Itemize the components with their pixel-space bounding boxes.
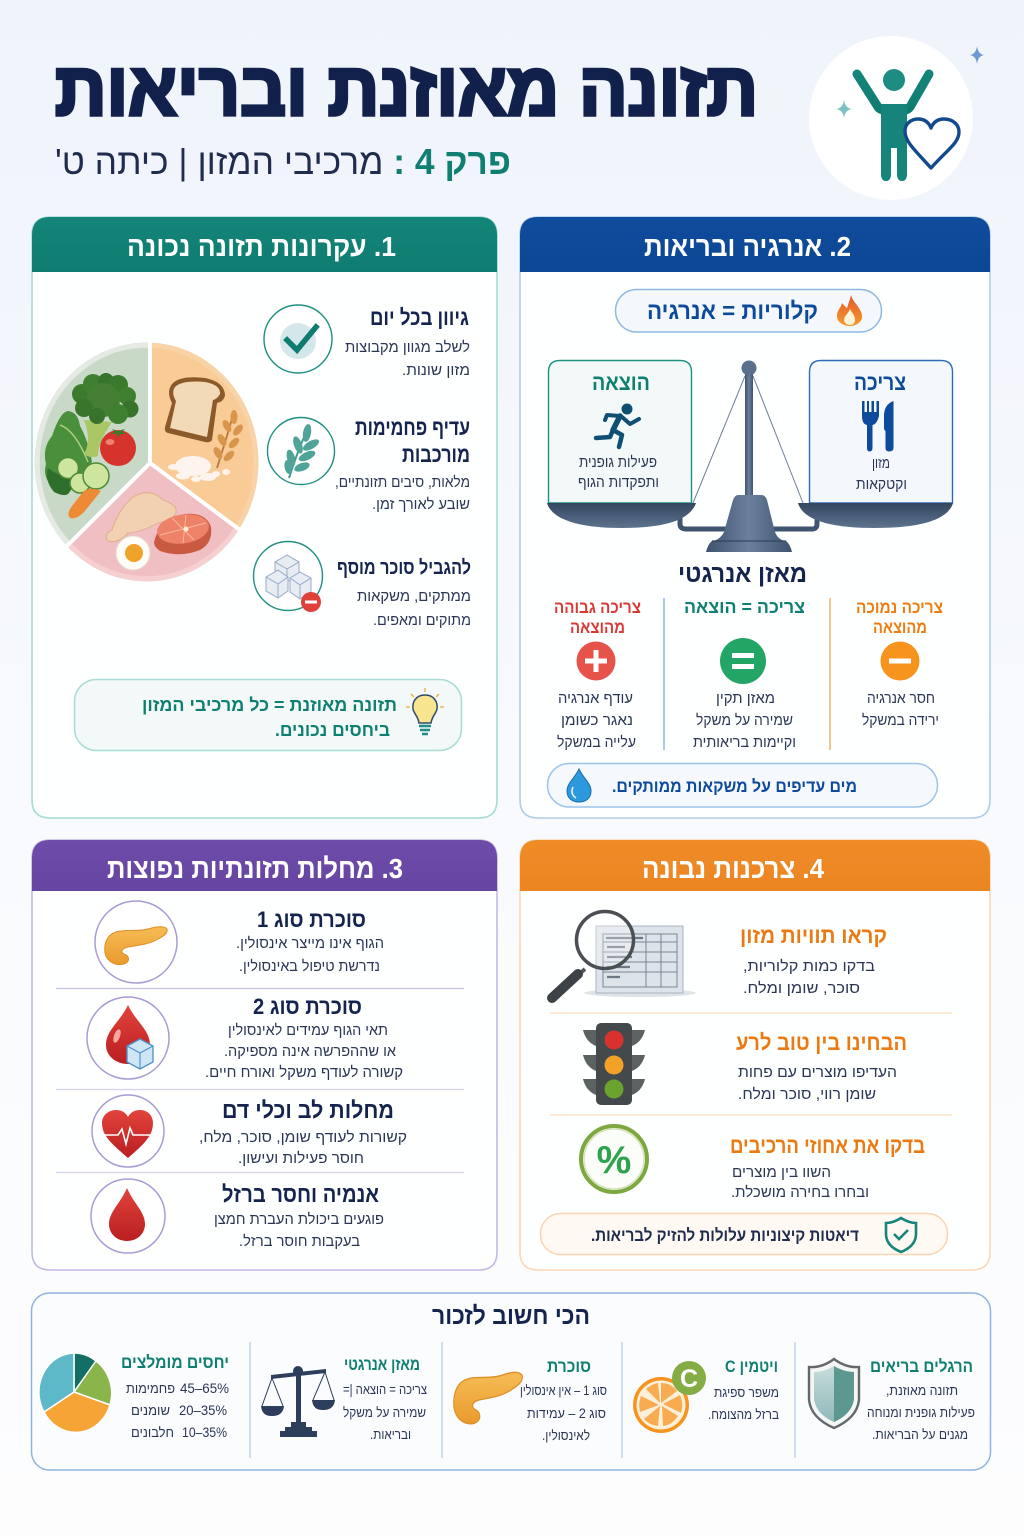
summary: healthy habits: הרגלים בריאים — [870, 1357, 973, 1376]
summary: recommended ratios: פחמימות — [126, 1381, 175, 1396]
summary: recommended ratios — [121, 1353, 229, 1440]
panel header: principles: 1. עקרונות תזונה נכונה — [127, 231, 396, 262]
item: prefer complex carbs — [335, 415, 470, 513]
icon: orange with vitamin C — [633, 1361, 706, 1433]
column: intake below output: מהוצאה — [873, 618, 927, 637]
box: energy out: פעילות גופנית — [579, 454, 657, 471]
icon: water drop — [567, 769, 591, 802]
box: energy in: וקטקאות — [856, 476, 907, 493]
row: heart disease: חוסר פעילות ועישון. — [238, 1150, 364, 1167]
panel header: consumption — [520, 840, 990, 891]
summary: vitamin C: ויטמין C — [725, 1357, 778, 1376]
bread — [165, 377, 225, 442]
summary: energy balance: ובריאות. — [370, 1427, 411, 1442]
row: heart disease — [199, 1097, 407, 1167]
summary: energy balance: צריכה = הוצאה |= — [343, 1382, 427, 1397]
item: limit added sugar — [337, 557, 471, 629]
row: tell good from bad: הבחינו בין טוב לרע — [736, 1030, 907, 1055]
column: intake equals output: וקיימות בריאותית — [693, 734, 796, 751]
wheat — [212, 410, 245, 468]
carrot — [68, 489, 101, 518]
row: anemia — [214, 1181, 384, 1250]
column: intake equals output — [684, 597, 805, 751]
rice — [168, 456, 230, 482]
summary: vitamin C: ברזל מהצומח. — [708, 1407, 779, 1422]
icon: wheat leaf — [268, 418, 334, 484]
panel: principles of proper nutrition — [32, 217, 497, 818]
icon: traffic light — [583, 1023, 645, 1105]
icon: percent badge — [581, 1126, 647, 1192]
icon: fork and knife — [862, 401, 894, 452]
item: prefer complex carbs: מלאות, סיבים תזונתיים, — [335, 474, 470, 491]
box: energy in — [810, 360, 952, 503]
pill: extreme diets warning: דיאטות קיצוניות עלולות להזיק לבריאות. — [591, 1226, 859, 1245]
summary: diabetes: סוג 1 – אין אינסולין — [520, 1383, 607, 1398]
summary: energy balance: שמירה על משקל — [343, 1405, 426, 1420]
box: energy in: צריכה — [854, 370, 906, 395]
tomato — [100, 429, 136, 466]
icon: balance scale small — [261, 1366, 335, 1437]
cucumbers — [58, 458, 109, 493]
column: intake below output: צריכה נמוכה — [856, 598, 943, 617]
summary: recommended ratios: חלבונים — [131, 1425, 174, 1440]
column: intake above output: נאגר כשומן — [561, 712, 633, 729]
item: variety every day: מזון שונות. — [402, 362, 470, 379]
summary: recommended ratios: 10–35% — [182, 1424, 227, 1440]
icon: check mark — [264, 305, 332, 373]
item: prefer complex carbs: עדיף פחמימות — [355, 415, 470, 440]
icon: blood drop and sugar cube — [87, 997, 169, 1079]
icon: equals — [720, 638, 766, 684]
row: type 2 diabetes: או שההפרשה אינה מספיקה. — [224, 1043, 397, 1060]
icon: magnifier over food label — [552, 912, 696, 998]
chart: recommended ratios pie — [39, 1353, 112, 1432]
pill: extreme diets warning — [540, 1214, 948, 1254]
panel header: diseases — [32, 840, 497, 891]
icon: orange with vitamin C: C — [680, 1365, 698, 1393]
summary: recommended ratios: 20–35% — [179, 1402, 227, 1418]
column: intake above output: עלייה במשקל — [557, 734, 636, 751]
row: type 2 diabetes — [205, 994, 403, 1081]
column: intake above output — [554, 598, 641, 751]
title: תזונה מאוזנת ובריאות — [55, 47, 758, 131]
pill: water over sweet drinks — [548, 764, 938, 807]
row: type 1 diabetes: סוכרת סוג 1 — [257, 907, 366, 932]
icon: plus — [576, 642, 616, 680]
summary: vitamin C: משפר ספיגת — [714, 1385, 779, 1400]
column: intake equals output: שמירה על משקל — [696, 712, 793, 729]
egg — [116, 536, 150, 570]
summary: diabetes: לאינסולין. — [542, 1428, 590, 1443]
summary: vitamin C — [708, 1357, 779, 1422]
icon: pancreas — [95, 901, 177, 983]
item: limit added sugar: ממתקים, משקאות — [357, 588, 471, 605]
panel header: diseases: 3. מחלות תזונתיות נפוצות — [107, 853, 403, 884]
row: type 1 diabetes: הגוף אינו מייצר אינסולין. — [236, 935, 384, 952]
summary: healthy habits — [867, 1357, 975, 1442]
summary: recommended ratios: יחסים מומלצים — [121, 1353, 229, 1372]
summary: energy balance: מאזן אנרגטי — [344, 1355, 420, 1374]
row: read food labels: סוכר, שומן ומלח. — [743, 980, 860, 997]
row: anemia: אנמיה וחסר ברזל — [222, 1181, 379, 1207]
illustration: plate with food groups — [35, 342, 258, 581]
pill: calories equal energy: קלוריות = אנרגיה — [647, 298, 818, 325]
panel header: energy: 2. אנרגיה ובריאות — [644, 231, 851, 262]
column: intake below output: ירידה במשקל — [862, 712, 939, 729]
row: type 2 diabetes: קשורה לעודף משקל ואורח חיים. — [205, 1064, 403, 1081]
panel: common nutrition diseases — [32, 840, 497, 1270]
row: read food labels: קראו תוויות מזון — [740, 923, 887, 948]
row: type 2 diabetes: סוכרת סוג 2 — [253, 994, 362, 1019]
box: energy out — [548, 360, 692, 503]
illustration: balance scale — [547, 360, 953, 552]
summary: healthy habits: מגנים על הבריאות. — [872, 1427, 968, 1442]
summary: energy balance — [343, 1355, 427, 1442]
row: tell good from bad — [736, 1030, 907, 1103]
summary: healthy habits: פעילות גופנית ומנוחה — [867, 1405, 975, 1420]
subtitle: פרק 4 : מרכיבי המזון | כיתה ט' — [55, 141, 511, 182]
row: read food labels — [740, 923, 887, 997]
row: check percentages: השוו בין מוצרים — [732, 1164, 831, 1181]
icon: shield — [809, 1359, 859, 1428]
row: type 1 diabetes: נדרשת טיפול באינסולין. — [239, 958, 380, 975]
column: intake above output: מהוצאה — [570, 618, 625, 637]
icon: percent badge: % — [597, 1139, 631, 1182]
icon: blood drop — [91, 1179, 165, 1253]
chicken — [106, 493, 176, 542]
panel header: energy — [520, 217, 990, 272]
row: check percentages: ובחרו בחירה מושכלת. — [731, 1184, 869, 1201]
summary: diabetes: סוג 2 – עמידות — [527, 1406, 606, 1421]
heading: most important to remember: הכי חשוב לזכור — [432, 1302, 590, 1330]
icon: runner — [596, 404, 639, 447]
row: heart disease: קשורות לעודף שומן, סוכר, מלח, — [199, 1129, 407, 1146]
column: intake above output: עודף אנרגיה — [558, 690, 633, 707]
panel header: consumption: 4. צרכנות נבונה — [642, 853, 824, 884]
pill: calories equal energy — [616, 290, 882, 332]
icon: heart with pulse — [92, 1095, 164, 1167]
pill: water over sweet drinks: מים עדיפים על משקאות ממותקים. — [612, 777, 857, 796]
icon: minus — [880, 642, 920, 680]
row: tell good from bad: שומן רווי, סוכר ומלח. — [738, 1086, 876, 1103]
salmon — [154, 511, 211, 554]
summary: recommended ratios: 45–65% — [180, 1380, 229, 1396]
row: anemia: פוגעים ביכולת העברת חמצן — [214, 1211, 384, 1228]
icon: shield with check — [886, 1218, 916, 1252]
icon: pancreas small — [454, 1372, 522, 1424]
item: variety every day: לשלב מגוון מקבוצות — [345, 339, 470, 356]
heading: energy balance: מאזן אנרגטי — [678, 560, 807, 588]
summary: diabetes — [520, 1357, 607, 1443]
broccoli — [72, 373, 138, 457]
row: read food labels: בדקו כמות קלוריות, — [743, 958, 875, 975]
icon: sugar cubes with minus — [254, 542, 322, 612]
item: variety every day — [345, 305, 470, 379]
box: energy out: ותפקדות הגוף — [578, 474, 659, 491]
row: anemia: בעקבות חוסר ברזל. — [239, 1233, 360, 1250]
column: intake equals output: צריכה = הוצאה — [684, 597, 805, 617]
summary: healthy habits: תזונה מאוזנת, — [886, 1383, 958, 1398]
row: type 2 diabetes: תאי הגוף עמידים לאינסולין — [228, 1022, 388, 1039]
panel: most important to remember — [32, 1293, 990, 1470]
panel: smart consumption — [520, 840, 990, 1270]
callout: balanced diet: ביחסים נכונים. — [275, 720, 390, 740]
icon: flame — [837, 295, 862, 326]
column: intake below output: חסר אנרגיה — [867, 690, 935, 707]
row: check percentages — [730, 1133, 925, 1201]
box: energy in: מזון — [872, 455, 890, 472]
column: intake equals output: מאזן תקין — [716, 690, 775, 707]
callout: balanced diet — [74, 680, 462, 750]
row: type 1 diabetes — [236, 907, 384, 975]
summary: recommended ratios: שומנים — [131, 1403, 170, 1418]
item: limit added sugar: מתוקים ומאפים. — [373, 612, 471, 629]
icon: light bulb — [406, 688, 444, 734]
panel header: principles — [32, 217, 497, 272]
row: check percentages: בדקו את אחוזי הרכיבים — [730, 1133, 925, 1158]
lettuce — [45, 411, 92, 494]
panel: energy and health — [520, 217, 990, 818]
box: energy out: הוצאה — [592, 370, 650, 395]
row: heart disease: מחלות לב וכלי דם — [222, 1097, 394, 1123]
column: intake below output — [856, 598, 943, 729]
column: intake above output: צריכה גבוהה — [554, 598, 641, 617]
item: variety every day: גיוון בכל יום — [370, 305, 469, 330]
item: prefer complex carbs: שובע לאורך זמן. — [372, 496, 470, 513]
item: prefer complex carbs: מורכבות — [402, 442, 470, 467]
item: limit added sugar: להגביל סוכר מוסף — [337, 557, 471, 579]
summary: diabetes: סוכרת — [547, 1357, 591, 1376]
row: tell good from bad: העדיפו מוצרים עם פחות — [738, 1064, 897, 1081]
callout: balanced diet: תזונה מאוזנת = כל מרכיבי המזון — [142, 695, 397, 715]
icon: healthy person with heart — [809, 36, 984, 200]
